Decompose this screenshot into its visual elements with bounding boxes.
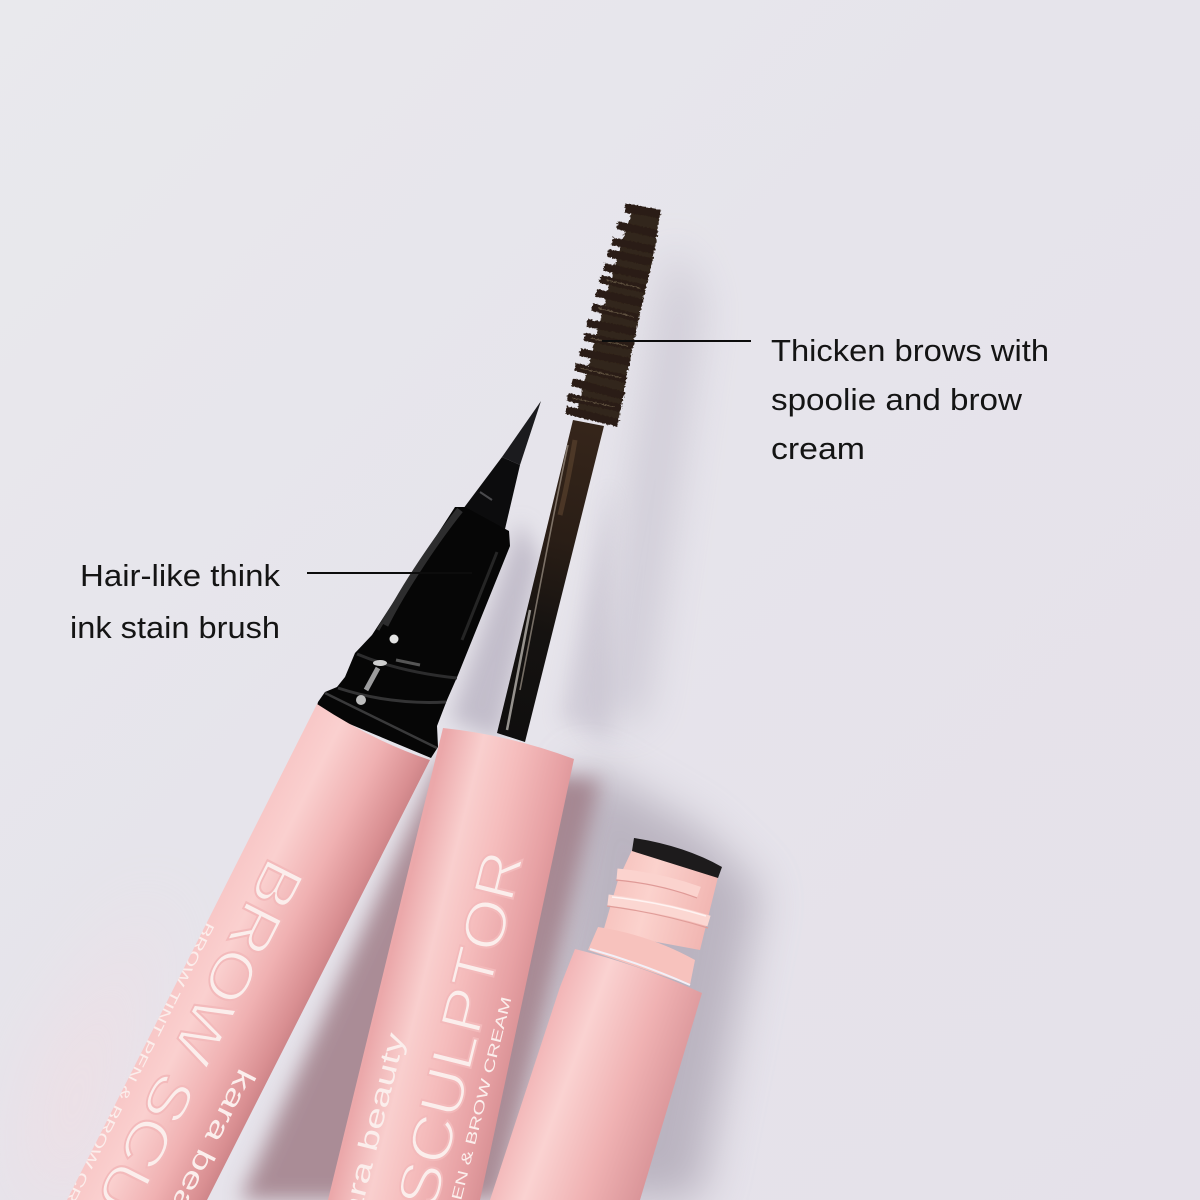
callout text: Hair-like think — [80, 558, 281, 593]
callout: spoolie: cream — [771, 431, 865, 466]
pen two: spoolie tube — [328, 728, 574, 1200]
pen one lettering: BROW TINT PEN & BROW CR — [62, 919, 217, 1200]
spoolie wand — [497, 208, 660, 742]
cap neck — [603, 850, 718, 950]
callout: spoolie — [602, 333, 1049, 466]
pen one body — [67, 704, 430, 1200]
pen one lettering: BROW SCUL — [65, 849, 316, 1200]
leader line — [602, 340, 751, 342]
callout: spoolie: spoolie and brow — [771, 382, 1023, 417]
leader line — [307, 572, 472, 574]
soft shadows on paper — [20, 240, 760, 1200]
callout: hair-like brush — [70, 558, 472, 645]
pen tip — [463, 401, 541, 529]
black nozzle — [316, 507, 510, 758]
callout: hair-like brush: ink stain brush — [70, 610, 280, 645]
pen one: brush tip pen — [62, 401, 541, 1200]
open cap — [490, 838, 722, 1200]
wand stem — [497, 420, 604, 742]
callout text: Thicken brows with — [771, 333, 1049, 368]
pen one lettering: kara bea — [163, 1064, 261, 1200]
cap threads — [617, 874, 699, 892]
spoolie brush — [566, 208, 660, 424]
product photo callout infographic — [67, 203, 1047, 1200]
black rim — [632, 838, 722, 878]
cap collar — [588, 927, 695, 985]
pen two lettering: EN & BROW CREAM — [449, 995, 515, 1200]
cap body — [490, 949, 702, 1200]
